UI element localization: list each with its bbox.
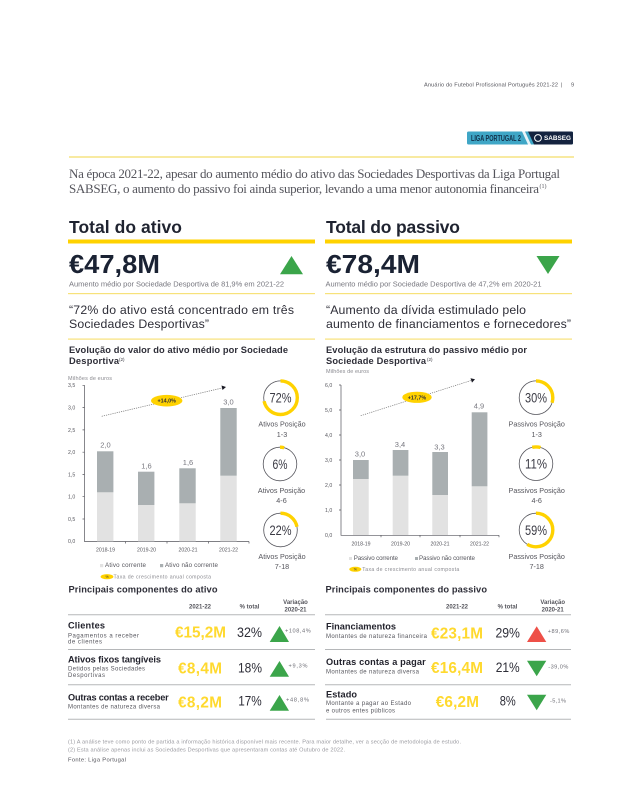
quote bbox=[326, 303, 571, 331]
row: Ativos fixos tangíveis: +9,3% bbox=[288, 664, 308, 670]
table header: % total bbox=[498, 605, 518, 611]
donut: 22%: 7-18 bbox=[275, 562, 289, 571]
quote: “Aumento da dívida estimulado pelo bbox=[326, 303, 526, 317]
donut: 59%: 7-18 bbox=[530, 562, 544, 571]
quote: Sociedades Desportivas” bbox=[69, 317, 209, 331]
row: Estado: €6,2M bbox=[436, 694, 479, 711]
donut: 22%: 22% bbox=[270, 523, 292, 538]
bars bbox=[97, 408, 237, 541]
axis labels bbox=[325, 383, 332, 539]
axis labels: 3,0 bbox=[68, 406, 75, 412]
donut: 72%: 1-3 bbox=[277, 430, 287, 439]
intro heading rule and text: SABSEG, o aumento do passivo foi ainda superior, levando a uma menor autonomia financeira bbox=[69, 181, 539, 196]
row: Financiamentos: Montantes de natureza financeira bbox=[326, 634, 428, 640]
table header: Variação bbox=[283, 600, 308, 606]
legend: Taxa de crescimento anual composta bbox=[114, 574, 211, 580]
axis labels: 2,0 bbox=[325, 483, 332, 489]
intro heading rule and text: Na época 2021-22, apesar do aumento médio do ativo das Sociedades Desportivas da Liga Portugal bbox=[69, 166, 560, 181]
donut: 72%: Ativos Posição bbox=[258, 420, 306, 429]
row: Outras contas a receber bbox=[68, 692, 309, 712]
bar chart: ativo bbox=[68, 376, 249, 580]
axis labels: 0,0 bbox=[68, 539, 75, 545]
row: Estado: e outros entes públicos bbox=[326, 709, 395, 715]
axis labels: 2,5 bbox=[68, 428, 75, 434]
donuts: passivos bbox=[509, 381, 565, 571]
table header: Variação bbox=[540, 600, 565, 606]
chart title: Sociedade Desportiva bbox=[326, 356, 427, 366]
donut: 59%: 59% bbox=[525, 523, 547, 538]
chart title bbox=[326, 345, 527, 366]
running header: | bbox=[561, 82, 562, 88]
row: Estado: Montante a pagar ao Estado bbox=[326, 701, 412, 707]
years: 2020-21 bbox=[430, 541, 450, 547]
years: 2021-22 bbox=[470, 541, 489, 547]
donut: 30% bbox=[509, 381, 565, 439]
table title: Principais componentes do passivo bbox=[326, 585, 487, 595]
value: 47,8M: €47,8M bbox=[69, 251, 160, 279]
arrow: growth trend bbox=[361, 378, 475, 416]
row: Outras contas a pagar: -39,0% bbox=[548, 664, 568, 670]
table header: 2021-22 bbox=[189, 605, 212, 611]
axis labels: 1,5 bbox=[68, 472, 75, 478]
bar values: 1,6 bbox=[183, 458, 193, 467]
footnotes and source: (2) Esta análise apenas inclui as Sociedades Desportivas que apresentaram contas até Outubro de 2022. bbox=[68, 747, 345, 753]
years: 2018-19 bbox=[351, 541, 371, 547]
donut: 72%: 72% bbox=[270, 391, 292, 406]
donut: 22%: Ativos Posição bbox=[258, 552, 306, 561]
bar values: 3,0 bbox=[223, 397, 234, 406]
value: 78,4M: €78,4M bbox=[326, 251, 420, 279]
donut: 11%: Passivos Posição bbox=[509, 486, 565, 495]
years: 2018-19 bbox=[96, 548, 115, 554]
bar chart: ativo: Milhões de euros bbox=[68, 376, 112, 382]
legend: % bbox=[354, 568, 357, 572]
bar values: 2,0 bbox=[100, 441, 111, 450]
row: Outras contas a receber: €8,2M bbox=[178, 695, 222, 712]
chart title: Desportiva bbox=[69, 356, 120, 366]
row: Financiamentos: +89,6% bbox=[548, 629, 569, 635]
row: Ativos fixos tangíveis bbox=[68, 655, 308, 679]
intro heading rule and text: (1) bbox=[540, 183, 546, 190]
icon: green up triangle bbox=[280, 256, 303, 274]
legend: Ativo não corrente bbox=[165, 562, 219, 569]
axis labels: 0,5 bbox=[68, 517, 75, 523]
table header: 2020-21 bbox=[284, 608, 307, 614]
row: Financiamentos bbox=[326, 621, 569, 642]
row: Ativos fixos tangíveis: Ativos fixos tangíveis bbox=[68, 655, 161, 665]
donuts: ativos bbox=[258, 381, 306, 571]
callout: +17,7%: +17,7% bbox=[408, 395, 426, 401]
donut: 30%: 30% bbox=[525, 391, 547, 406]
row: Outras contas a pagar bbox=[326, 657, 568, 677]
years: 2021-22 bbox=[219, 548, 238, 554]
logo: Liga Portugal 2 SABSEG: SABSEG bbox=[544, 136, 571, 142]
callout: +17,7% bbox=[402, 392, 432, 403]
row: Financiamentos: Financiamentos bbox=[326, 621, 396, 631]
sublabel: Aumento médio por Sociedade Desportiva de 81,9% em 2021-22 bbox=[69, 280, 284, 288]
axis labels: 1,0 bbox=[325, 508, 332, 514]
chart title: (2) bbox=[427, 357, 433, 362]
logo: Liga Portugal 2 SABSEG: LIGA PORTUGAL 2 bbox=[471, 134, 521, 143]
donut: 6%: 6% bbox=[272, 457, 288, 472]
row: Ativos fixos tangíveis: Detidos pelas Sociedades bbox=[68, 667, 145, 673]
axis labels: 4,0 bbox=[325, 433, 332, 439]
row: Outras contas a receber: Montantes de natureza diversa bbox=[68, 705, 161, 711]
row: Outras contas a pagar: Outras contas a pagar bbox=[326, 657, 426, 667]
axis labels: 5,0 bbox=[325, 408, 332, 414]
legend bbox=[349, 555, 476, 573]
table header bbox=[446, 600, 565, 614]
bar values bbox=[355, 401, 484, 459]
donut: 72% bbox=[258, 381, 306, 439]
row: Clientes bbox=[68, 621, 311, 646]
footnotes and source: Fonte: Liga Portugal bbox=[68, 758, 126, 764]
donut: 11%: 4-6 bbox=[532, 496, 542, 505]
row: Outras contas a receber: Outras contas a receber bbox=[68, 692, 169, 702]
row: Outras contas a receber: +48,8% bbox=[286, 698, 309, 704]
row: Ativos fixos tangíveis: 18% bbox=[238, 659, 262, 675]
legend bbox=[100, 562, 219, 580]
quote: aumento de financiamentos e fornecedores” bbox=[326, 317, 571, 331]
chart title: (2) bbox=[119, 357, 125, 362]
bar chart: passivo bbox=[325, 378, 499, 573]
table: componentes do ativo bbox=[68, 585, 315, 719]
donut: 11%: 11% bbox=[525, 457, 547, 472]
row: Outras contas a receber: 17% bbox=[238, 692, 262, 708]
logo: Liga Portugal 2 SABSEG bbox=[467, 132, 573, 144]
row: Clientes: +108,4% bbox=[285, 629, 311, 635]
running header: 9 bbox=[571, 82, 574, 88]
row: Clientes: 32% bbox=[237, 624, 262, 640]
row: Estado: -5,1% bbox=[550, 699, 566, 705]
axis labels: 3,5 bbox=[68, 383, 75, 389]
panel: total do passivo: Milhões de euros bbox=[326, 369, 369, 375]
icon: green down triangle bbox=[536, 256, 560, 274]
row: Clientes: Clientes bbox=[68, 621, 105, 631]
axis labels bbox=[68, 383, 75, 545]
bar values bbox=[100, 397, 234, 470]
footnotes and source bbox=[68, 740, 461, 764]
panel: total do ativo bbox=[68, 217, 315, 366]
legend: Ativo corrente bbox=[105, 562, 147, 569]
quote bbox=[69, 303, 294, 331]
axis labels: 3,0 bbox=[325, 458, 332, 464]
axis labels: 6,0 bbox=[325, 383, 332, 389]
years: 2019-20 bbox=[391, 541, 410, 547]
table header: % total bbox=[240, 605, 260, 611]
quote: “72% do ativo está concentrado em três bbox=[69, 303, 294, 317]
axis labels: 2,0 bbox=[68, 450, 75, 456]
callout: +14,0% bbox=[151, 395, 182, 407]
row: Financiamentos: €23,1M bbox=[431, 625, 483, 642]
row: Outras contas a pagar: 21% bbox=[496, 659, 520, 675]
row: Clientes: Pagamentos a receber bbox=[68, 633, 139, 639]
row: Ativos fixos tangíveis: €8,4M bbox=[178, 660, 222, 677]
donut: 22% bbox=[258, 513, 306, 571]
table header bbox=[189, 600, 308, 614]
legend: Passivo corrente bbox=[354, 555, 399, 562]
row: Estado: 8% bbox=[500, 693, 516, 709]
legend: % bbox=[105, 575, 109, 579]
heading: Total do passivo: Total do passivo bbox=[326, 217, 460, 237]
donut: 59% bbox=[509, 513, 565, 571]
row: Outras contas a pagar: Montantes de natureza diversa bbox=[326, 669, 420, 675]
row: Estado bbox=[326, 689, 566, 715]
panel: total do passivo bbox=[325, 217, 572, 375]
heading: Total do ativo: Total do ativo bbox=[69, 217, 182, 237]
row: Ativos fixos tangíveis: Desportivas bbox=[68, 673, 105, 679]
arrow: growth trend bbox=[102, 386, 226, 416]
chart title: Evolução da estrutura do passivo médio por bbox=[326, 345, 527, 355]
donut: 6%: Ativos Posição bbox=[258, 486, 305, 495]
legend: Passivo não corrente bbox=[419, 555, 476, 562]
axis labels: 0,0 bbox=[325, 533, 332, 539]
donut: 30%: Passivos Posição bbox=[509, 420, 565, 429]
row: Estado: Estado bbox=[326, 689, 357, 699]
years: 2020-21 bbox=[178, 548, 198, 554]
years bbox=[351, 541, 489, 547]
bars bbox=[353, 412, 487, 535]
table header: 2020-21 bbox=[542, 608, 564, 614]
running header: Anuário do Futebol Profissional Português 2021-22 bbox=[424, 82, 558, 88]
axis labels: 1,0 bbox=[68, 495, 75, 501]
bar values: 1,6 bbox=[141, 461, 152, 470]
row: Clientes: €15,2M bbox=[175, 624, 226, 641]
table: componentes do passivo bbox=[325, 585, 571, 719]
donut: 6%: 4-6 bbox=[276, 496, 287, 505]
years: 2019-20 bbox=[137, 548, 156, 554]
row: Clientes: de clientes bbox=[68, 640, 102, 646]
row: Financiamentos: 29% bbox=[495, 624, 520, 640]
footnotes and source: (1) A análise teve como ponto de partida a informação histórica disponível mais recente. Para maior detalhe, ver a secção de metodologia de estudo. bbox=[68, 740, 461, 746]
donut: 6% bbox=[258, 447, 305, 505]
years bbox=[96, 548, 238, 554]
donut: 59%: Passivos Posição bbox=[509, 552, 565, 561]
table title: Principais componentes do ativo bbox=[68, 585, 218, 595]
donut: 11% bbox=[509, 444, 565, 505]
bar values: 4,9 bbox=[474, 401, 484, 410]
bar values: 3,3 bbox=[434, 442, 445, 451]
donut: 30%: 1-3 bbox=[532, 430, 542, 439]
callout: +14,0%: +14,0% bbox=[157, 399, 176, 405]
bar values: 3,0 bbox=[355, 450, 365, 459]
intro heading rule and text bbox=[69, 156, 574, 196]
table header: 2021-22 bbox=[446, 605, 469, 611]
bar values: 3,4 bbox=[395, 440, 405, 449]
row: Outras contas a pagar: €16,4M bbox=[431, 660, 483, 677]
sublabel: Aumento médio por Sociedade Desportiva de 47,2% em 2020-21 bbox=[326, 280, 542, 288]
chart title: Evolução do valor do ativo médio por Sociedade bbox=[69, 345, 288, 355]
chart title bbox=[69, 345, 288, 366]
legend: Taxa de crescimento anual composta bbox=[362, 567, 459, 573]
